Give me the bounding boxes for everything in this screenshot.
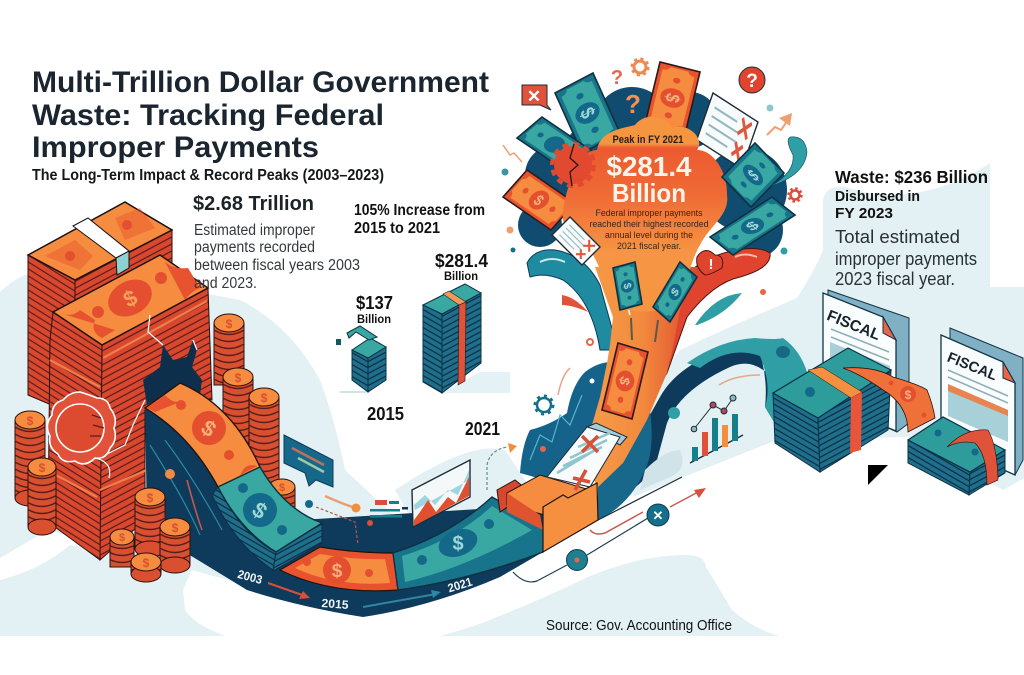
stat: 105% increase [354,202,485,237]
icon: question bubble: ? [746,71,758,92]
label: 2021 bar value [435,251,488,283]
blue wave left of eruption [520,362,612,480]
callout text: peak in FY 2021: Peak in FY 2021 [612,134,684,146]
stat: 105% increase: 2015 to 2021 [354,220,440,237]
orange bill left [503,170,575,230]
front stack [48,255,212,560]
teal bill left [517,117,592,172]
label: 2015 bar value: Billion [357,312,391,326]
coin stacks back: $ [235,371,242,385]
orange curved bill [145,383,260,487]
icon: broken gear [552,144,594,186]
stat: total improper payments: between fiscal years 2003 [194,257,360,274]
label: 2021 bar value: Billion [444,269,478,283]
coin stacks front: $ [119,532,125,544]
subtitle: The Long-Term Impact & Record Peaks (2003–2023) [32,167,384,184]
small paper [552,217,600,265]
stat: waste 236 billion: Disbursed in [835,188,920,205]
teal bill right [722,143,784,207]
red right splash [650,249,770,400]
curved navy timeline ribbon [145,408,545,617]
title [32,66,489,164]
dotted flow and small markers [305,443,517,545]
icon: exclamation bubble: ! [708,256,714,273]
orange stream bill: $ [616,374,632,387]
callout text: peak in FY 2021: Federal improper payments [596,208,703,219]
label: 2015 bar value [356,293,393,326]
fiscal document two: FISCAL [945,350,999,384]
stat: 105% increase: 105% Increase from [354,202,485,219]
fiscal documents and money, right [773,290,1023,495]
teal bill top left: $ [576,103,600,122]
source: Source: Gov. Accounting Office [546,618,732,634]
teal curved bill stack: $ [248,497,272,524]
orange bill top [645,62,700,134]
folder front [543,483,598,552]
callout text: peak in FY 2021: annual level during the [605,230,693,241]
stat: total improper payments [193,193,360,292]
small teal bill: $ [621,282,633,291]
orange bill flowing [843,368,935,432]
big money stacks [15,202,295,560]
stat: waste 236 billion: Total estimated [835,226,960,247]
label: 2015 bar value: $137 [356,293,393,313]
icon: teal swirl [771,137,807,186]
back stack [28,202,172,415]
orange stream bill [602,343,648,419]
icon: x bubble: ✕ [527,87,541,106]
bar and line chart [690,395,743,463]
icon: x bubble [522,85,551,110]
teal money stack large [773,348,891,472]
coin stacks left: $ [27,414,34,428]
ribbon year labels: 2003 [236,567,264,587]
stat: total improper payments: Estimated improper [194,222,315,239]
coin stacks front: $ [143,556,150,570]
stat: waste 236 billion: 2023 fiscal year. [835,268,955,289]
flying bills behind cloud [503,62,758,230]
stat: total improper payments: and 2023. [194,275,257,292]
teal curved bill stack [212,467,322,571]
label: year 2015: 2015 [367,404,404,424]
wax seal [47,392,115,464]
icon: question mark on blob: ? [625,89,641,119]
icon: trending arrow [767,113,792,135]
lower connectors [513,518,648,582]
callout text: peak in FY 2021: 2021 fiscal year. [617,241,681,252]
title: Improper Payments [32,131,319,164]
coin stacks back: $ [261,391,268,405]
small teal bill two [653,262,697,322]
orange curved bill: $ [197,415,221,442]
orange flat bill [280,547,398,591]
icons around eruption [502,59,807,275]
icon: gear top [632,59,648,75]
decorative dots [502,104,788,254]
teal bill right: $ [745,166,763,185]
teal money stack small [908,417,1005,495]
eruption backdrop blobs [518,87,787,258]
icon: question bubble [739,67,765,93]
fiscal document one [823,290,909,432]
title: Multi-Trillion Dollar Government [32,66,489,99]
document [547,423,627,490]
orange bill left: $ [529,192,547,210]
stat: waste 236 billion: improper payments [835,248,977,269]
back folder [497,480,530,512]
title: Waste: Tracking Federal [32,99,384,132]
callout text: peak in FY 2021: $281.4 [606,151,692,182]
teal bill lower right [710,197,795,255]
small teal bill [613,262,642,310]
navy and teal ribbon to right stacks [598,338,807,520]
orange flat bill: $ [332,561,343,582]
icon: red gear [788,188,802,202]
stat: waste 236 billion [835,167,988,289]
folder with document [497,423,706,582]
bills over cloud [552,143,795,419]
stat: waste 236 billion: Waste: $236 Billion [835,167,988,187]
coin stacks back: $ [279,482,285,494]
stat: total improper payments: $2.68 Trillion [193,193,314,215]
teal left splash [527,250,618,350]
coin stacks back: $ [226,317,233,331]
cloud callout shape [563,117,727,312]
icon: speech bubble [284,435,333,487]
eruption stream [527,249,770,487]
label: year 2021: 2021 [465,419,500,439]
coin stacks back [214,314,295,507]
callout text: peak in FY 2021: Billion [612,178,686,208]
stat: waste 236 billion: FY 2023 [835,205,893,222]
mini area chart [412,460,470,527]
icon: question mark: ? [611,67,623,89]
teal long bill [393,497,545,590]
black triangle [868,465,888,485]
callout text: peak in FY 2021: reached their highest recorded [590,219,708,230]
teal bill lower right: $ [743,219,763,234]
fiscal document one: FISCAL [824,307,883,344]
paper with cross [697,93,758,169]
coin stacks left: $ [39,461,46,475]
folder with document: ✕ [653,508,663,523]
stat: total improper payments: payments recorded [194,239,315,256]
small money stack 2015 [336,326,386,392]
teal bill top left [555,73,620,153]
ribbon year labels [236,567,474,612]
fiscal document two [941,328,1023,475]
torn hole and cracks [95,315,202,478]
coin stacks left [15,411,56,535]
tall money stack 2021 [423,284,510,393]
icon: exclamation bubble [697,250,723,275]
orange stream body [575,267,697,487]
orange bill flowing: $ [905,388,912,402]
coin stacks front [110,488,190,582]
label: 2021 bar value: $281.4 [435,251,488,271]
icon: gear [535,396,553,414]
coin stacks front: $ [147,491,154,505]
ribbon year labels: 2021 [446,575,474,595]
ribbon year labels: 2015 [321,596,349,612]
teal long bill: $ [452,533,464,555]
orange bill top: $ [661,91,684,105]
callout text: peak in FY 2021 [590,134,708,252]
front stack: $ [119,285,142,312]
timeline bills [145,383,545,591]
coin stacks front: $ [172,521,179,535]
small teal bill two: $ [669,285,682,299]
